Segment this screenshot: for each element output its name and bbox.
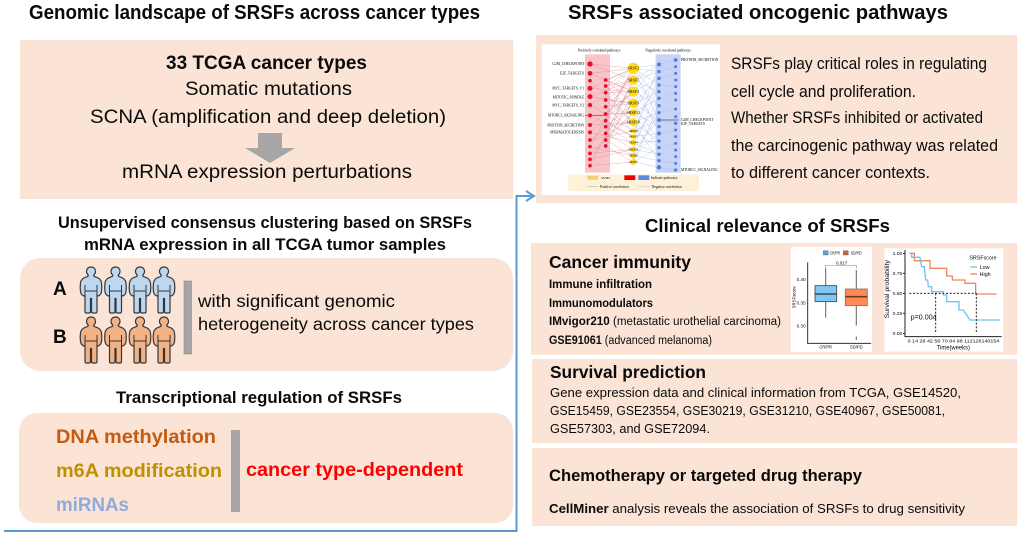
panel: survival prediction [532,359,1017,443]
chart: survival curve: High [980,272,991,278]
divider bar [184,281,192,354]
list: immunity datasets: Immunomodulators [549,298,653,310]
text: datasets: GSE15459, GSE23554, GSE30219, GSE31210, GSE40967, GSE50081, [550,404,945,418]
network figure: SRSF2 [628,66,639,71]
text: mRNA expression perturbations: mRNA expression perturbations [122,161,412,183]
heading: genomic landscape: Genomic landscape of SRSFs across cancer types [29,1,480,24]
chart: SRSFscore box plot: SD/PD [851,250,862,255]
pathway labels: Positively correlated pathways [578,49,621,53]
chart: survival curve: SRSFscore [969,256,997,262]
panel: TCGA inputs [20,40,513,199]
heading: consensus clustering: mRNA expression in all TCGA tumor samples [84,235,446,254]
negative links [633,60,676,170]
panel: cancer immunity [531,243,1017,355]
text: SRSFs description: cell cycle and proliferation. [731,83,916,101]
pathway labels: G2M_CHECKPOINT [681,118,714,122]
chart: survival curve: 0.50 [893,291,903,297]
text: SRSFs description: the carcinogenic pathway was related [731,137,998,155]
chart: survival curve: 0.00 [893,331,903,337]
chart: survival curve: Survival probability [885,260,891,318]
text: CellMiner: CellMiner analysis reveals the association of SRSFs to drug sensitivity [549,501,966,516]
text: datasets [550,386,961,436]
network figure [542,44,720,195]
heading: cancer immunity: Cancer immunity [549,252,691,272]
network figure: SRSF12 [627,110,640,115]
text: cancer type-dependent: cancer type-dependent [246,460,464,481]
panel: chemotherapy [532,448,1017,526]
pathway labels: PROTEIN_SECRETION [547,124,584,128]
heading: clinical relevance: Clinical relevance of SRSFs [645,216,890,236]
icons: group B people [80,317,175,363]
network figure: SRSF3 [628,89,639,94]
text: SRSFs description: Whether SRSFs inhibited or activated [731,109,983,127]
network legend: Indicate pathways [651,176,678,180]
text: miRNAs: miRNAs [56,495,129,516]
network figure: SRSF6 [629,154,638,158]
heading: chemotherapy: Chemotherapy or targeted drug therapy [549,466,863,485]
network figure: SRSF5 [629,160,638,164]
chart: SRSFscore box plot: 0.017 [836,260,848,265]
chart: survival curve [884,248,1003,352]
arrow: connector from left column to pathways [4,191,534,531]
chart: survival curve: Time(weeks) [937,346,970,352]
pathway labels: MYC_TARGETS_V1 [552,87,584,91]
pathway labels: G2M_CHECKPOINT [552,62,585,66]
chart: survival curve: 0.25 [893,311,903,317]
pathway labels: E2F_TARGETS [560,71,584,75]
network figure: SRSF7 [629,135,638,139]
pathway labels: MTORC1_SIGNALING [548,113,584,117]
chart: SRSFscore box plot: SRSFscore [791,286,796,308]
panel: oncogenic pathways [536,35,1017,203]
heading: consensus clustering [58,213,472,254]
label: A: A [53,279,67,300]
chart: SRSFscore box plot: CR/PR [819,344,833,349]
network legend [568,175,699,191]
heading: consensus clustering: Unsupervised consensus clustering based on SRSFs [58,213,472,232]
pathway labels: MYC_TARGETS_V2 [552,103,584,107]
text: DNA methylation: DNA methylation [56,427,216,448]
network legend: Positive correlation [600,185,629,189]
heading: transcriptional regulation: Transcriptional regulation of SRSFs [116,388,402,407]
pathway labels: E2F_TARGETS [681,122,705,126]
label: B: B [53,327,67,348]
text: heterogeneity: with significant genomic [197,291,395,311]
chart: survival curve: p=0.004 [911,313,937,322]
network figure: SRSF10 [627,120,640,125]
text: SCNA: SCNA (amplification and deep deletion) [90,106,446,128]
pathway labels: SPERMATOGENESIS [550,131,584,135]
pathway labels [547,49,719,172]
chart: SRSFscore box plot: 0.30 [797,323,806,328]
text: 33 TCGA cancer types: 33 TCGA cancer types [166,52,367,74]
heading: oncogenic pathways: SRSFs associated oncogenic pathways [568,1,948,24]
chart: SRSFscore box plot [791,247,872,352]
chart: survival curve: 0 14 28 42 56 70 84 98 112126140154 [908,338,1000,344]
pathway labels: PROTEIN_SECRETION [681,58,719,62]
network legend: SSSFs [601,176,611,180]
text: heterogeneity: heterogeneity across cancer types [198,314,474,334]
panel: clusters [20,258,513,371]
chart: SRSFscore box plot: 0.35 [797,300,806,305]
text: m6A modification: m6A modification [56,461,222,482]
chart: SRSFscore box plot: SD/PD [850,344,863,349]
chart: survival curve: 0.75 [893,271,903,277]
text: SRSFs description [731,55,998,182]
network legend: Negative correlation [652,185,682,189]
network figure: SRSF11 [628,147,639,151]
chart: survival curve: 1.00 [893,251,903,257]
pathway labels: Negatively correlated pathways [645,49,691,53]
chart: survival curve: Low [980,265,990,271]
blue nodes [657,58,677,172]
icons: group A people [80,267,175,313]
list: immunity datasets: Immune infiltration [549,279,652,291]
network figure: SRSF9 [628,101,639,106]
heading: survival prediction: Survival prediction [550,362,706,382]
network figure: SRSF8 [629,129,638,133]
text: SRSFs description: to different cancer contexts. [731,164,930,182]
text: somatic mutations: Somatic mutations [185,78,352,100]
list: immunity datasets [549,279,781,347]
pathway labels: MTORC1_SIGNALING [681,168,718,172]
text: datasets: Gene expression data and clinical information from TCGA, GSE14520, [550,386,961,400]
positive links [590,64,633,166]
network figure: SRSF4 [629,141,638,145]
list: immunity datasets: IMvigor210 (metastatic urothelial carcinoma) [549,316,781,328]
text: datasets: GSE57303, and GSE72094. [550,422,710,436]
pathway labels: MITOTIC_SPINDLE [553,95,585,99]
chart: SRSFscore box plot: CR/PR [830,250,840,255]
SRSF nodes [628,63,639,165]
chart: SRSFscore box plot: 0.40 [797,277,806,282]
text: heterogeneity [197,291,474,334]
list: immunity datasets: GSE91061 (advanced melanoma) [549,335,712,347]
network figure: SRSF1 [628,77,639,82]
panel: transcriptional regulation [19,413,513,523]
arrow: down [245,133,295,163]
red nodes [587,61,607,167]
divider bar [231,430,240,512]
text: SRSFs description: SRSFs play critical roles in regulating [731,55,987,73]
